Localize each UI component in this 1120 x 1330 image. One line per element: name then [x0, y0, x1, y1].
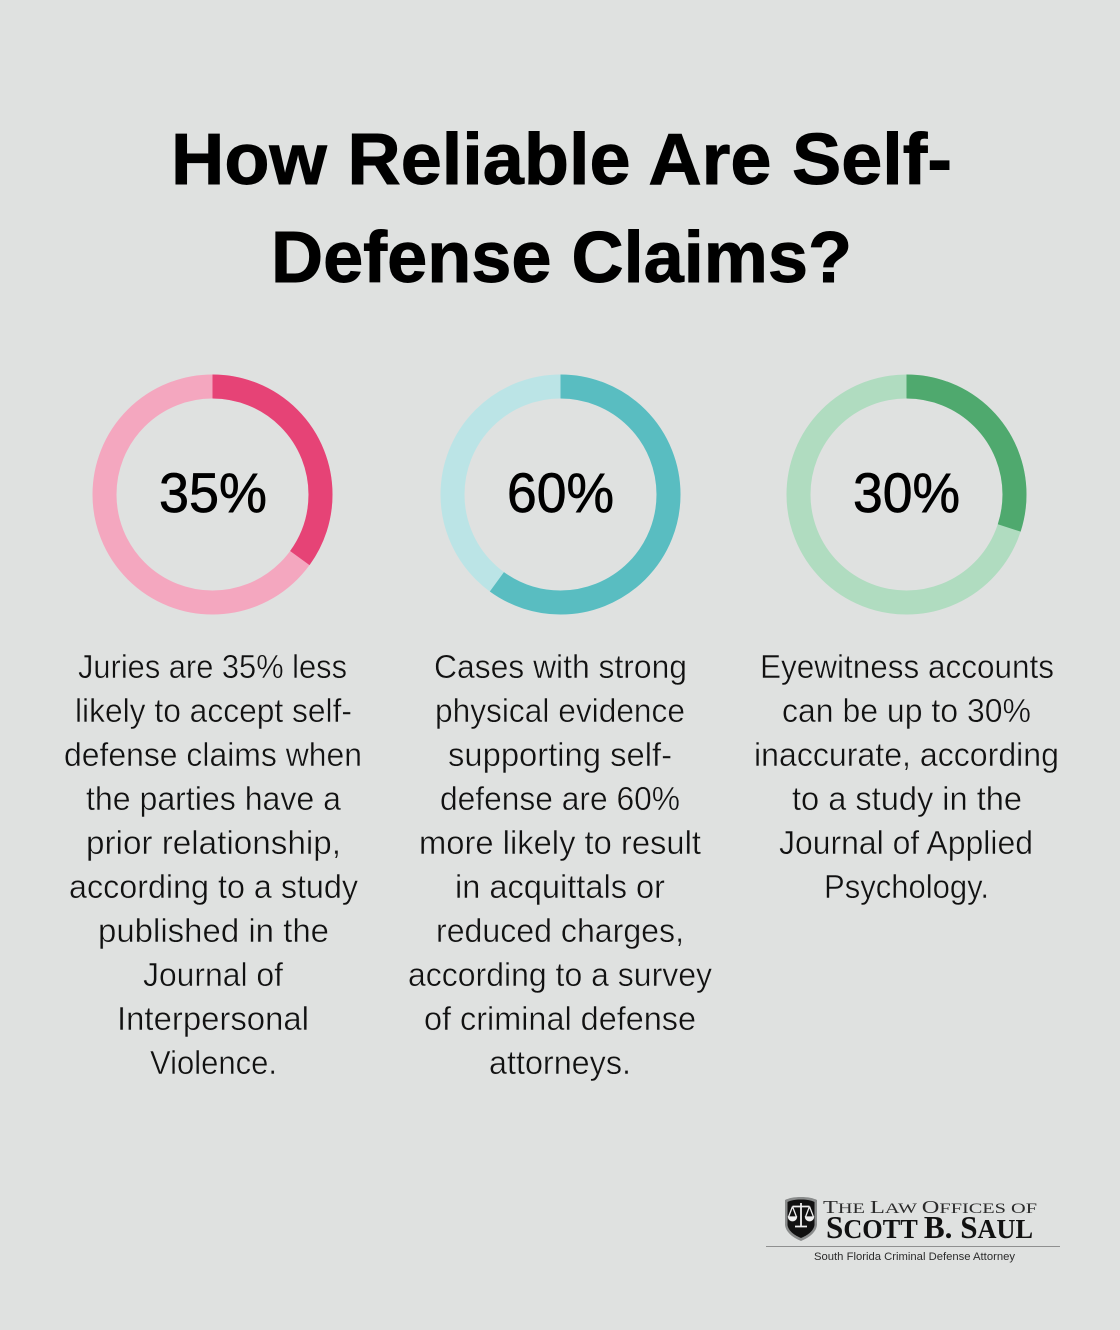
icon: shield with scales of justice [785, 1197, 817, 1241]
text block: physical evidence description: supporting self- [448, 736, 672, 773]
text block: jury description: Juries are 35% less [78, 648, 347, 685]
donut chart: 60%: 60% [507, 461, 614, 524]
text block: physical evidence description: according to a survey [408, 956, 712, 993]
text block: jury description: the parties have a [86, 780, 342, 817]
panel: 35% jury statistic [64, 386, 362, 1081]
text block: jury description: Interpersonal [117, 1000, 309, 1037]
text block: physical evidence description: of criminal defense [424, 1000, 696, 1037]
text block: physical evidence description: in acquittals or [455, 868, 665, 905]
title: How Reliable Are Self- [171, 120, 952, 200]
donut chart: 30% [798, 386, 1014, 602]
text block: physical evidence description: Cases with strong [434, 648, 687, 685]
donut chart: 35%: 35% [159, 461, 267, 524]
text block: eyewitness description [754, 648, 1059, 905]
title: Defense Claims? [271, 218, 852, 298]
title [171, 120, 952, 298]
text block: jury description: published in the [98, 912, 329, 949]
donut chart: 35% [104, 386, 320, 602]
text block: physical evidence description: more likely to result [419, 824, 701, 861]
text block: jury description: prior relationship, [86, 824, 341, 861]
logo text: the law offices of: T HE L AW O FFICES OF [823, 1197, 1037, 1217]
text block: jury description: defense claims when [64, 736, 362, 773]
text block: eyewitness description: Journal of Applied [779, 824, 1033, 861]
logo text: Scott B. Saul: SCOTT B. SAUL [826, 1209, 1033, 1245]
text block: eyewitness description: inaccurate, according [754, 736, 1059, 773]
text block: eyewitness description: Eyewitness accounts [760, 648, 1054, 685]
text block: eyewitness description: can be up to 30% [782, 692, 1031, 729]
text block: eyewitness description: to a study in the [792, 780, 1022, 817]
text block: physical evidence description: reduced charges, [436, 912, 684, 949]
logo divider [766, 1246, 1060, 1247]
text block: physical evidence description [408, 648, 712, 1081]
donut chart: 60% [452, 386, 668, 602]
text block: physical evidence description: defense are 60% [440, 780, 680, 817]
text block: jury description: Journal of [143, 956, 284, 993]
text block: jury description: according to a study [69, 868, 358, 905]
logo: law offices of Scott B. Saul [766, 1197, 1060, 1263]
logo tagline: South Florida Criminal Defense Attorney [814, 1251, 1016, 1263]
panel: 30% eyewitness statistic [754, 386, 1059, 905]
text block: jury description [64, 648, 362, 1081]
text block: eyewitness description: Psychology. [824, 868, 989, 905]
text block: jury description: Violence. [150, 1044, 277, 1081]
donut chart: 30%: 30% [853, 461, 960, 524]
text block: physical evidence description: physical evidence [435, 692, 685, 729]
panel: 60% physical evidence statistic [408, 386, 712, 1081]
text block: jury description: likely to accept self- [75, 692, 352, 729]
text block: physical evidence description: attorneys. [489, 1044, 631, 1081]
